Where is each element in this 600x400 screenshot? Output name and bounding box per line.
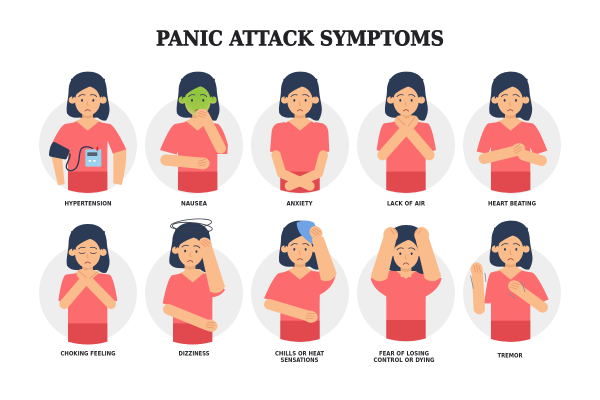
title: PANIC ATTACK SYMPTOMS [156,26,444,50]
label line 2: CONTROL OR DYING [374,357,434,364]
figure torso [386,257,426,341]
figure torso [280,108,320,193]
label: CHILLS OR HEAT [275,350,325,358]
head [279,221,322,273]
head [490,221,533,273]
figure torso [280,257,320,342]
icon: dizzy rings [170,217,213,234]
panel: nausea [145,72,243,207]
head with green face [177,72,220,124]
head with closed eyes [67,224,110,276]
label: TREMOR [498,352,523,359]
head [385,225,428,277]
panel: dizziness [145,217,243,358]
head [169,222,214,276]
icon: blood pressure cuff [49,142,70,159]
label: CHOKING FEELING [60,350,116,358]
figure torso [173,260,213,344]
panel: chills or heat sensations [251,220,349,364]
figure torso [68,260,108,344]
figure torso [68,108,108,193]
label line 2: SENSATIONS [280,357,318,364]
sleeves and arms to throat [58,271,117,305]
icon: cable [66,147,93,171]
sleeves and arms to throat [377,117,436,155]
head [385,72,428,124]
sleeves and arms [264,223,337,324]
panel: lack of air [357,72,455,207]
sleeves and crossed arms [270,122,329,186]
label: LACK OF AIR [387,200,425,207]
raised forearm [194,106,221,148]
label: ANXIETY [286,200,313,207]
head [67,72,110,124]
figure torso [386,108,426,193]
label: HEART BEATING [488,200,536,207]
panel: heart beating [463,72,561,207]
sleeves and arms on chest [477,122,547,161]
label: HYPERTENSION [64,200,112,207]
raised arms and hands [371,227,441,281]
panel: tremor [463,221,561,359]
icon: tremor lines [471,273,525,298]
label: FEAR OF LOSING [379,350,429,358]
sleeves and arms [50,122,126,185]
label: DIZZINESS [178,350,210,358]
figure torso [178,108,218,193]
head [279,72,322,124]
label: NAUSEA [181,200,207,207]
panel: choking feeling [39,224,137,358]
panel: fear of losing control or dying [357,225,455,364]
icon: ice pack [297,220,317,245]
sleeves and left arm [160,122,228,169]
icon: monitor [85,146,101,167]
head [489,72,532,124]
sleeves and arms [471,262,549,309]
sleeves behind arms [371,270,442,297]
panel: hypertension [39,72,137,207]
figure torso [491,108,531,193]
figure torso [491,257,531,342]
panel: anxiety [251,72,349,207]
sleeves and arms [163,235,225,334]
